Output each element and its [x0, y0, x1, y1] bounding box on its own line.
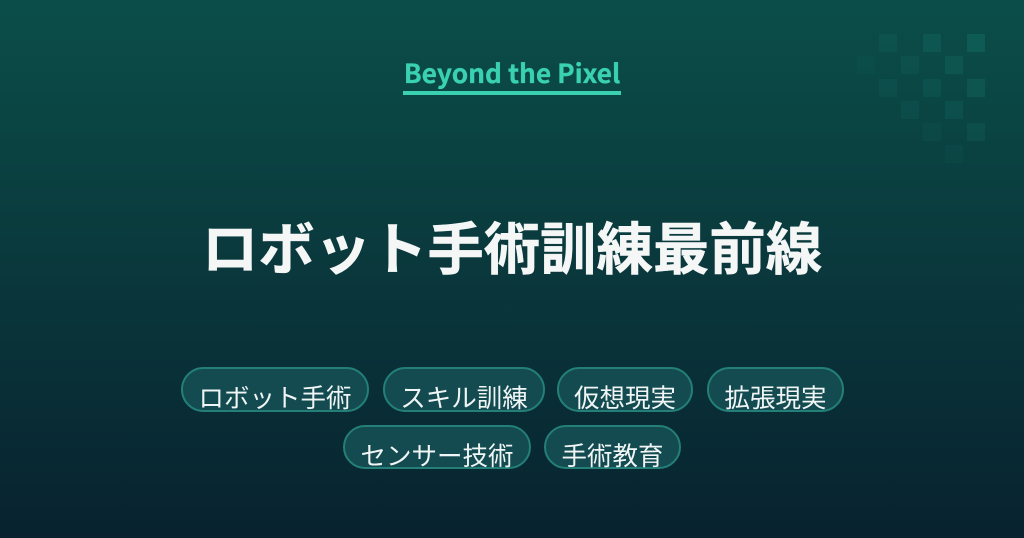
tag: robot surgery: [181, 367, 369, 412]
decorative pixel grid: [923, 34, 985, 141]
tag: skill training: スキル訓練: [400, 378, 528, 415]
tag: surgical education: [544, 425, 681, 469]
tag: augmented reality: [707, 367, 844, 412]
tag: robot surgery: ロボット手術: [198, 378, 352, 415]
tag: sensor technology: [343, 425, 531, 469]
tag: virtual reality: [557, 367, 693, 412]
tag: sensor technology: センサー技術: [360, 436, 514, 473]
tag: skill training: [383, 367, 545, 412]
tag: virtual reality: 仮想現実: [574, 378, 676, 415]
tag: augmented reality: 拡張現実: [724, 378, 826, 415]
brand label with underline: Beyond the Pixel: [404, 52, 620, 91]
tag: surgical education: 手術教育: [561, 436, 664, 473]
title: ロボット手術訓練最前線: [202, 205, 822, 286]
